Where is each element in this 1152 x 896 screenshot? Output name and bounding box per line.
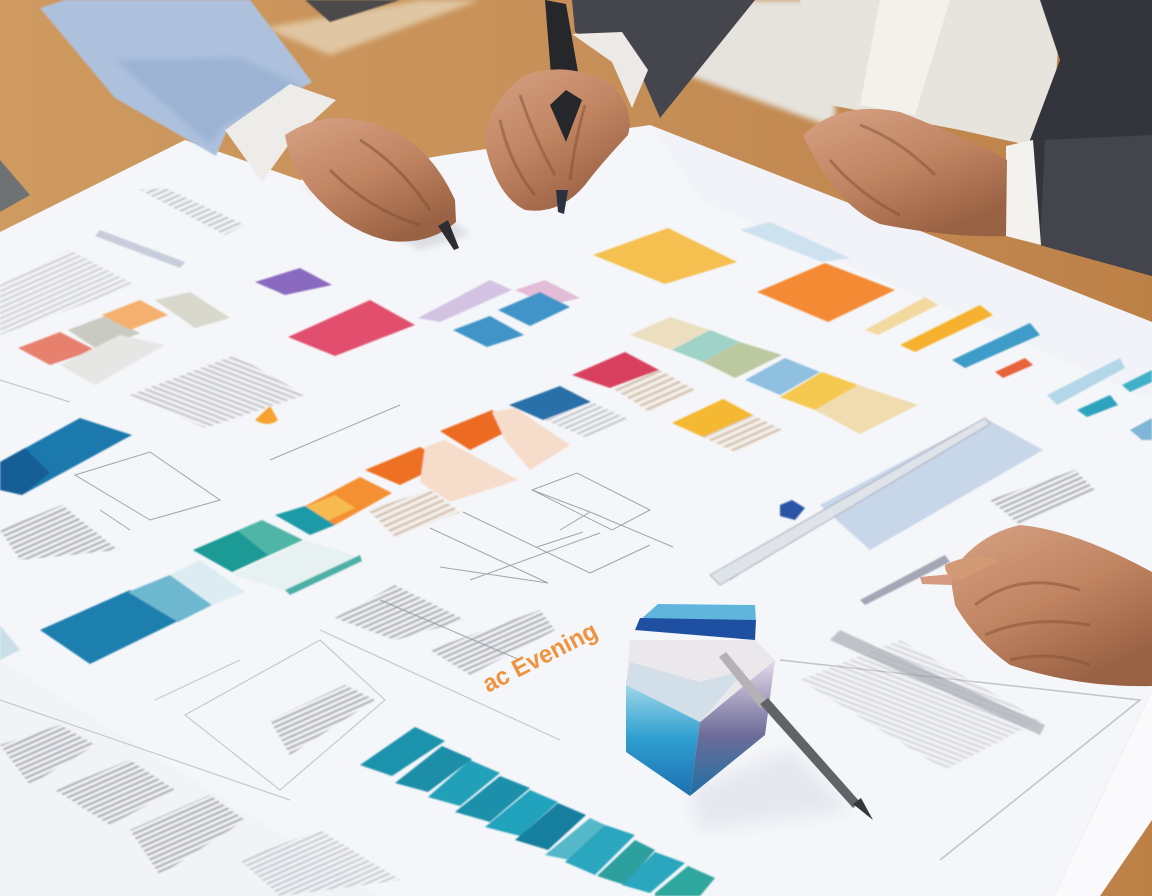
bottom teal swatch row [360, 727, 715, 896]
swatch strip centre right [630, 317, 918, 434]
suit jacket centre [572, 0, 755, 118]
laptop corner [0, 160, 30, 212]
orange heading text: ac Evening [478, 617, 602, 698]
hand: top right [803, 109, 1007, 236]
shirt cuff centre [572, 32, 648, 108]
diagonal cards [0, 352, 782, 664]
pen: held upright [545, 0, 583, 142]
top row colour swatches [593, 222, 1152, 440]
text block patches [0, 250, 1095, 896]
hand: top centre [484, 69, 630, 214]
upper left swatches [18, 188, 580, 424]
left sleeve and cuff [40, 0, 400, 182]
cube object [626, 604, 850, 830]
pen on paper [719, 652, 873, 820]
flow diagram [75, 405, 673, 660]
hand: top left [285, 118, 470, 250]
large ruled panel [710, 418, 1043, 585]
hand: lower right [920, 525, 1152, 686]
suit and shirt right [800, 0, 1152, 276]
